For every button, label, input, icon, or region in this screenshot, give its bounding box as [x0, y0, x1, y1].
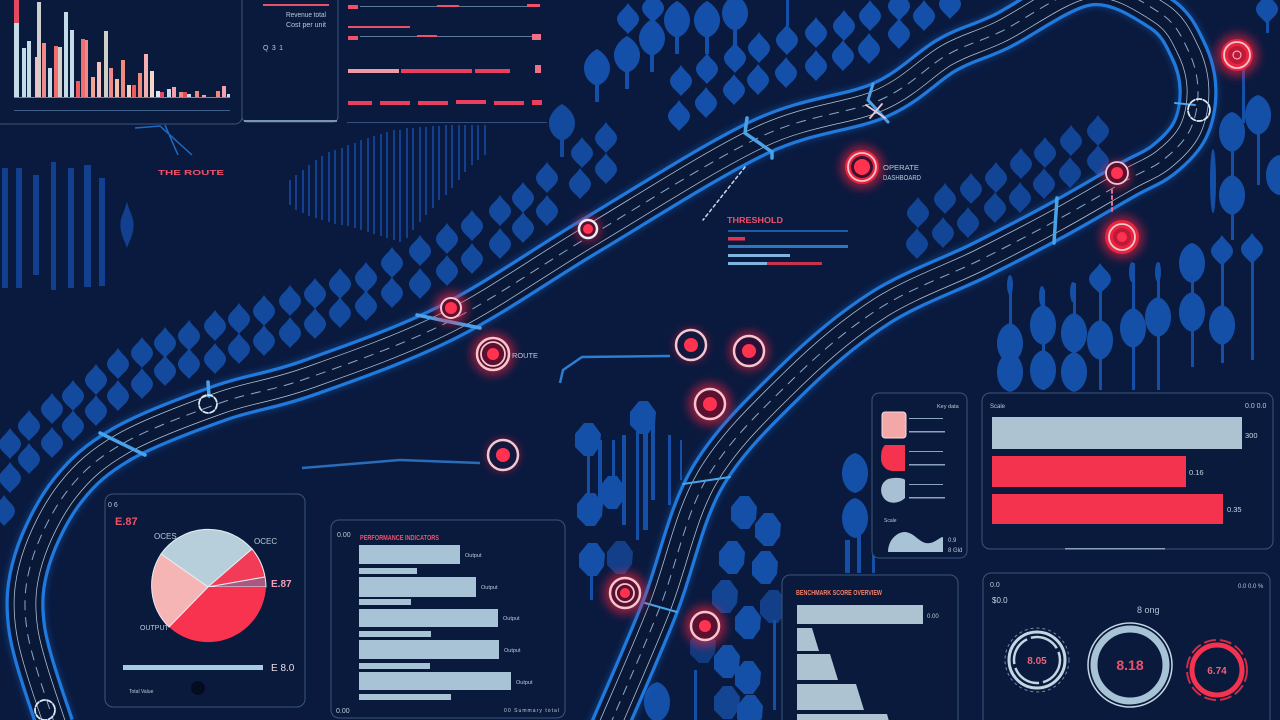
pie label top right: OCEC [254, 537, 277, 546]
marker: centre left [472, 333, 514, 375]
marker: road red 1 [435, 292, 467, 324]
decoration: central thin bars [290, 125, 485, 242]
floating caption: THE ROUTE [158, 170, 225, 177]
marker: upper centre [841, 146, 883, 188]
panel: legend [872, 393, 967, 558]
decoration: diagonal droplet band [0, 104, 617, 526]
paired bar labels: Output [481, 585, 498, 591]
paired bar labels: Output [504, 648, 521, 654]
marker: right [1101, 216, 1143, 258]
pie legend: Total Value [129, 689, 154, 695]
decoration: right droplet cluster [906, 115, 1109, 259]
pie progress bar [123, 665, 263, 670]
pie label right: E.87 [271, 579, 292, 590]
marker: centre c [689, 383, 731, 425]
connector lines [302, 356, 670, 468]
panel: top small summary [242, 0, 338, 122]
panel: horizontal bars [982, 393, 1273, 550]
decoration: stemmed droplets, right [997, 0, 1280, 392]
column chart [14, 0, 230, 111]
pie progress value: E 8.0 [271, 663, 295, 674]
gauges caption right: 0.0 0.0 % [1238, 584, 1264, 590]
blue accent strokes [135, 125, 192, 155]
gauge right [1187, 640, 1247, 700]
paired bar labels: Output [465, 553, 482, 559]
legend area label: Scale [884, 518, 897, 524]
panel: paired bars [331, 520, 565, 718]
gauge label middle: 8 ong [1137, 605, 1160, 615]
bar: red 2 [992, 494, 1223, 524]
gauge middle value: 8.18 [1116, 657, 1144, 673]
pie corner label: 0 6 [108, 502, 118, 509]
paired bars [359, 545, 511, 700]
panel: pie chart [105, 494, 305, 707]
marker: lower left [488, 440, 518, 470]
marker caption: centre left: ROUTE [512, 353, 538, 360]
paired bar labels: Output [516, 680, 533, 686]
paired bar labels: 0.00 [336, 708, 350, 715]
funnel bar top [797, 605, 923, 624]
marker: lower road [604, 572, 646, 614]
mini list block [727, 216, 848, 265]
gauges subtitle: $0.0 [992, 596, 1008, 605]
mini list title: THRESHOLD [727, 216, 783, 225]
pie label bottom: OUTPUT [140, 625, 170, 632]
legend title: Key data [937, 404, 960, 410]
gauge middle [1088, 623, 1172, 707]
marker: road red 2 [1104, 162, 1130, 188]
panel: top-left column chart [0, 0, 242, 124]
funnel title: BENCHMARK SCORE OVERVIEW [796, 590, 882, 597]
legend area value: 0.9 [948, 538, 957, 544]
paired bar labels [336, 553, 559, 715]
bar panel title: Scale [990, 404, 1006, 410]
decoration: droplets, bottom middle [575, 401, 875, 720]
bar labels [1189, 431, 1258, 514]
decoration: top droplet cluster [584, 0, 961, 131]
bar panel meta: 0.0 0.0 [1245, 403, 1267, 410]
bar: red 1 [992, 456, 1186, 487]
gauges caption left: 0.0 [990, 582, 1000, 589]
marker caption: upper centre: OPERATE [883, 165, 919, 172]
bar labels: 0.35 [1227, 505, 1242, 514]
summary caption 1: Revenue total [286, 12, 326, 19]
funnel label: 0.00 [927, 614, 939, 620]
paired bar labels: 00 Summary total [504, 708, 559, 714]
marker caption: second line: DASHBOARD [883, 175, 921, 182]
panel: gauges [983, 573, 1270, 720]
marker: centre a [676, 330, 706, 360]
marker: road red 3 [576, 217, 600, 241]
paired bars side label: 0.00 [337, 532, 351, 539]
gauge left value: 8.05 [1027, 656, 1047, 667]
legend swatch: grey [881, 478, 905, 503]
pie label top left: OCES [154, 532, 177, 541]
bar: grey [992, 417, 1242, 449]
gauge left [1005, 628, 1069, 692]
paired bars title: PERFORMANCE INDICATORS [360, 535, 439, 542]
decoration: left vertical bars [2, 162, 134, 290]
legend lines [909, 418, 945, 498]
legend area value 2: 8 Gld [948, 548, 962, 554]
legend area chart [888, 532, 943, 552]
panel: funnel bars [782, 575, 958, 720]
summary caption 3: Q 3 1 [263, 45, 283, 52]
gauge right value: 6.74 [1207, 666, 1227, 677]
pie title: E.87 [115, 516, 138, 528]
pie chart [152, 529, 266, 642]
bar labels: 0.16 [1189, 468, 1204, 477]
bar labels: 300 [1245, 431, 1258, 440]
marker: top right [1216, 34, 1258, 76]
paired bar labels: Output [503, 616, 520, 622]
panel: top timeline table [345, 0, 548, 123]
legend swatch: pink [882, 412, 906, 438]
summary caption 2: Cost per unit [286, 22, 326, 29]
marker: bottom [685, 606, 725, 646]
marker: centre b [730, 332, 768, 370]
legend swatch: red [881, 445, 905, 471]
funnel steps [797, 628, 890, 720]
